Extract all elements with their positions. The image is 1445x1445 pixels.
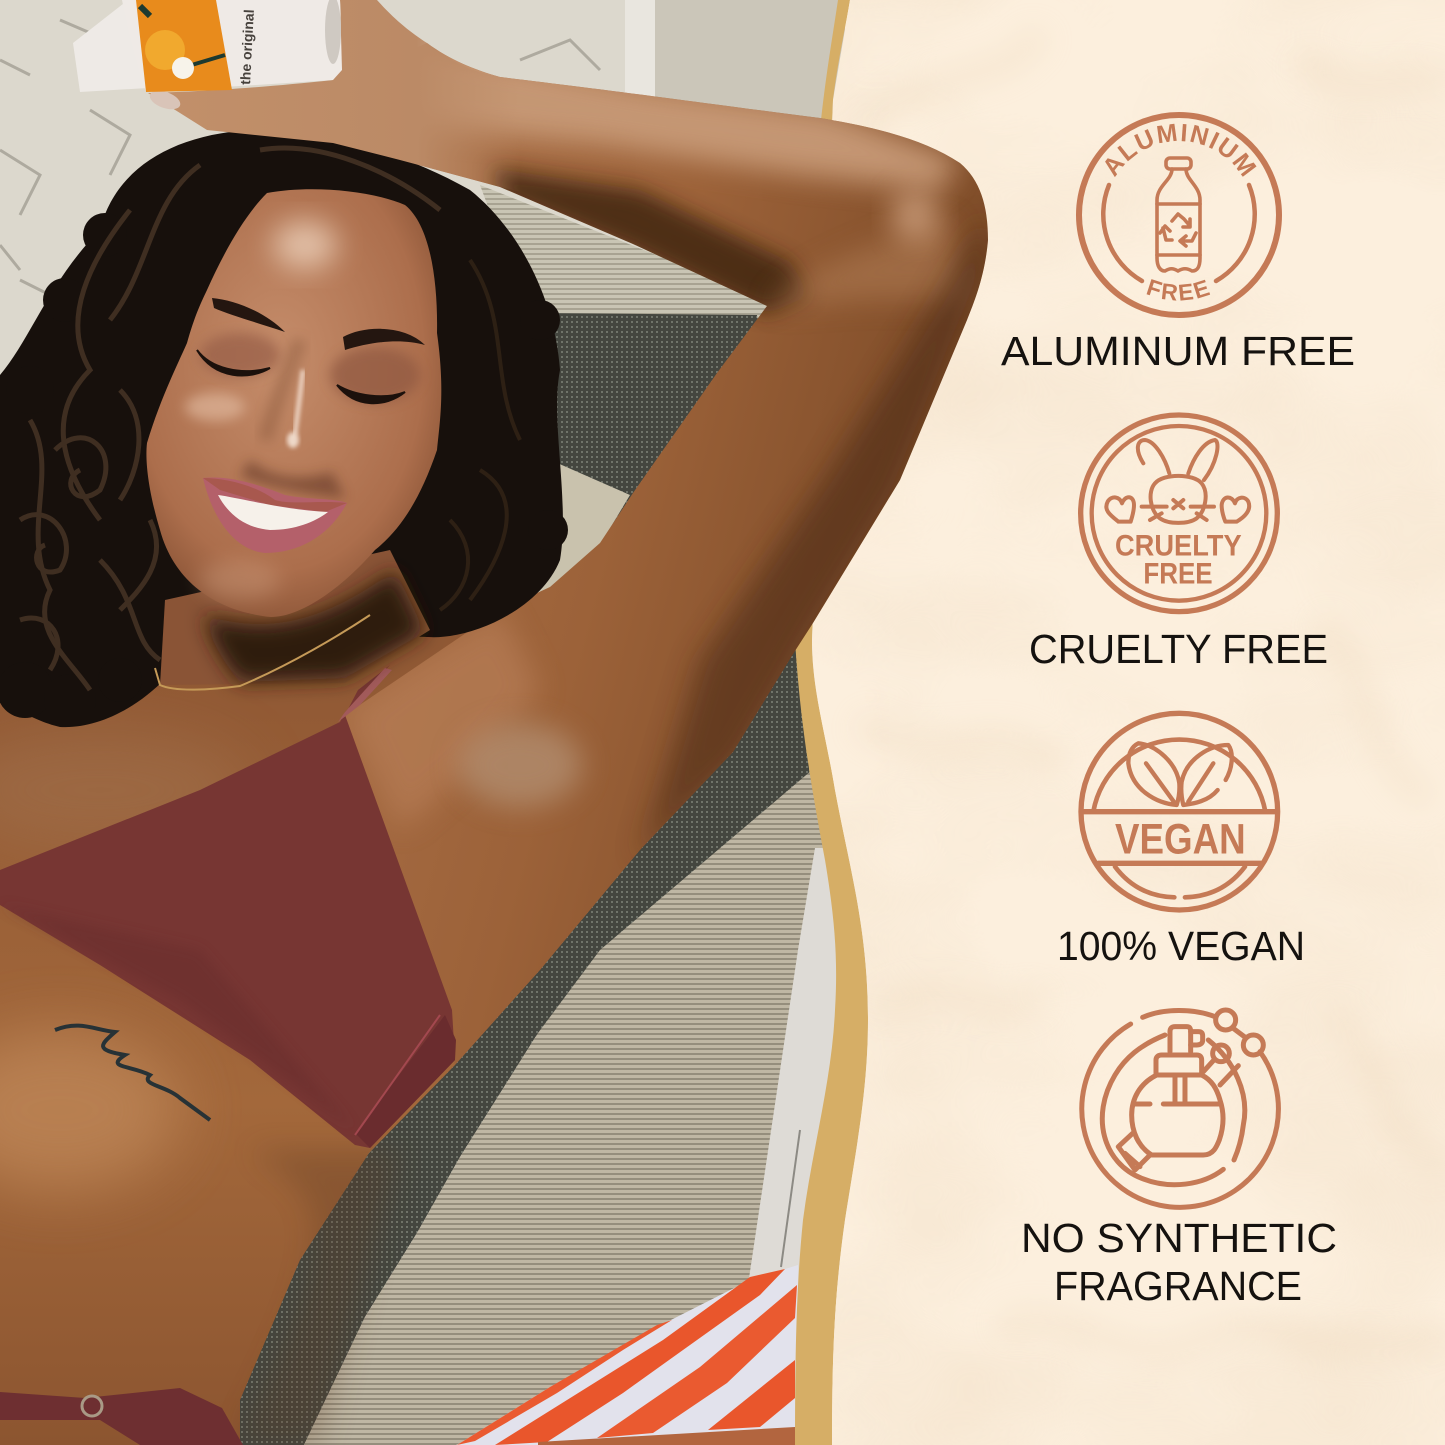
icon: bunny [1106,440,1249,523]
badge lettering: cruelty: CRUELTY [1115,530,1242,563]
badge: no synthetic fragrance [1082,1010,1278,1207]
hair [0,130,568,727]
striped towel [457,1265,800,1445]
upper arm and forearm [300,20,990,1065]
badge lettering: free: FREE [1143,557,1213,590]
fingernail [147,87,183,113]
label: no synthetic fragrance: NO SYNTHETIC [1021,1215,1337,1261]
icon: recycled bottle [1157,158,1200,271]
cream marble panel [810,0,1445,1445]
label: no synthetic fragrance [1021,1215,1337,1309]
icon: leaves [1128,743,1232,805]
badge: vegan [1081,713,1278,910]
red bikini top [0,665,456,1148]
label: cruelty free: CRUELTY FREE [1029,626,1328,672]
badge lettering: free: FREE [1146,279,1210,301]
lips and teeth [203,477,347,553]
face [146,189,441,617]
label: no synthetic fragrance: FRAGRANCE [1054,1263,1302,1309]
product bottle [73,0,342,92]
product label text: the original [237,9,257,85]
bikini bottom [0,1388,243,1445]
neck and necklace [155,550,430,690]
photo subject: torso [0,590,600,1445]
label: 100% vegan: 100% VEGAN [1057,923,1305,969]
badge lettering: aluminium: ALUMINIUM [1105,124,1256,177]
badge: aluminium free [1076,112,1282,318]
skin shading on torso [0,730,400,1445]
badge: cruelty free [1081,415,1277,612]
lounge chair: fabric, shadow, frame [225,185,880,1445]
badge lettering: vegan: VEGAN [1115,815,1246,863]
wavy gold band [795,0,868,1445]
hand [147,0,520,192]
label: aluminum free: ALUMINUM FREE [1001,328,1355,374]
photo background: stucco wall [0,0,845,700]
tattoo [55,1026,210,1120]
